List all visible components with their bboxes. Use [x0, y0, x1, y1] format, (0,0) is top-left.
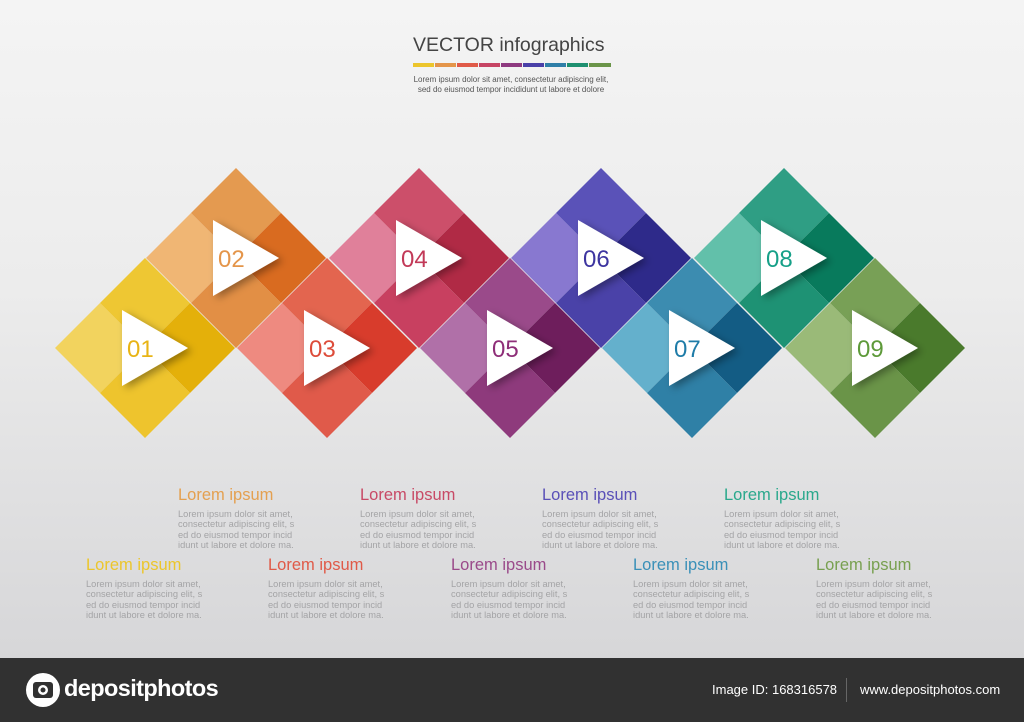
text block 04	[360, 486, 476, 550]
text: Lorem ipsum dolor sit amet,	[542, 509, 657, 519]
text: idunt ut labore et dolore ma.	[633, 610, 749, 620]
text block 09	[816, 556, 932, 620]
diamond 03: 03	[309, 336, 336, 363]
diamond 04: 04	[401, 246, 428, 273]
diamond 03	[237, 258, 417, 438]
text: Lorem ipsum	[360, 486, 455, 504]
text: consectetur adipiscing elit, s	[451, 589, 567, 599]
text: Lorem ipsum dolor sit amet,	[633, 579, 748, 589]
color bar	[413, 63, 611, 67]
text: Lorem ipsum	[633, 556, 728, 574]
diamond 06: 06	[583, 246, 610, 273]
text: Lorem ipsum dolor sit amet,	[178, 509, 293, 519]
text: idunt ut labore et dolore ma.	[86, 610, 202, 620]
diamond 02: 02	[218, 246, 245, 273]
diamond 09	[785, 258, 965, 438]
text block 01	[86, 556, 202, 620]
text block 05	[451, 556, 567, 620]
text: ed do eiusmod tempor incid	[724, 530, 838, 540]
text: Lorem ipsum dolor sit amet,	[268, 579, 383, 589]
text: consectetur adipiscing elit, s	[816, 589, 932, 599]
subtitle	[414, 75, 608, 94]
diamond 08	[694, 168, 874, 348]
diamond 07	[602, 258, 782, 438]
text: Lorem ipsum dolor sit amet,	[360, 509, 475, 519]
diamond 01: 01	[127, 336, 154, 363]
text: idunt ut labore et dolore ma.	[268, 610, 384, 620]
website: www.depositphotos.com	[860, 682, 1000, 697]
diamond 07: 07	[674, 336, 701, 363]
text: ed do eiusmod tempor incid	[633, 600, 747, 610]
subtitle: Lorem ipsum dolor sit amet, consectetur adipiscing elit,	[414, 75, 608, 84]
diamond 09: 09	[857, 336, 884, 363]
text: consectetur adipiscing elit, s	[724, 519, 840, 529]
text: idunt ut labore et dolore ma.	[360, 540, 476, 550]
diamond 04	[329, 168, 509, 348]
text: idunt ut labore et dolore ma.	[816, 610, 932, 620]
text: consectetur adipiscing elit, s	[178, 519, 294, 529]
text: idunt ut labore et dolore ma.	[451, 610, 567, 620]
text: Lorem ipsum	[542, 486, 637, 504]
diamond 02	[146, 168, 326, 348]
text block 07	[633, 556, 749, 620]
text: idunt ut labore et dolore ma.	[178, 540, 294, 550]
text: Lorem ipsum dolor sit amet,	[724, 509, 839, 519]
diamond 06	[511, 168, 691, 348]
text: idunt ut labore et dolore ma.	[724, 540, 840, 550]
text block 08	[724, 486, 840, 550]
text: consectetur adipiscing elit, s	[633, 589, 749, 599]
diamond 01	[55, 258, 235, 438]
text: Lorem ipsum	[178, 486, 273, 504]
text: ed do eiusmod tempor incid	[816, 600, 930, 610]
text: Lorem ipsum	[268, 556, 363, 574]
text: consectetur adipiscing elit, s	[86, 589, 202, 599]
text: ed do eiusmod tempor incid	[542, 530, 656, 540]
text: ed do eiusmod tempor incid	[178, 530, 292, 540]
text: consectetur adipiscing elit, s	[268, 589, 384, 599]
text: Lorem ipsum dolor sit amet,	[451, 579, 566, 589]
text block 06	[542, 486, 658, 550]
text: Lorem ipsum	[816, 556, 911, 574]
text: idunt ut labore et dolore ma.	[542, 540, 658, 550]
text: Lorem ipsum dolor sit amet,	[816, 579, 931, 589]
diamond chain	[55, 168, 965, 438]
text: Lorem ipsum	[724, 486, 819, 504]
image id: Image ID: 168316578	[712, 682, 837, 697]
text: ed do eiusmod tempor incid	[451, 600, 565, 610]
title: VECTOR infographics	[413, 34, 604, 56]
text: consectetur adipiscing elit, s	[542, 519, 658, 529]
text: ed do eiusmod tempor incid	[86, 600, 200, 610]
text: Lorem ipsum	[86, 556, 181, 574]
logo text: depositphotos	[64, 675, 218, 701]
diamond 08: 08	[766, 246, 793, 273]
text: Lorem ipsum	[451, 556, 546, 574]
text: consectetur adipiscing elit, s	[360, 519, 476, 529]
text: Lorem ipsum dolor sit amet,	[86, 579, 201, 589]
text block 03	[268, 556, 384, 620]
text block 02	[178, 486, 294, 550]
diamond 05	[420, 258, 600, 438]
footer bar	[0, 658, 1024, 722]
subtitle: sed do eiusmod tempor incididunt ut labore et dolore	[418, 85, 604, 94]
diamond 05: 05	[492, 336, 519, 363]
text: ed do eiusmod tempor incid	[360, 530, 474, 540]
icon: camera logo	[26, 673, 60, 707]
text: ed do eiusmod tempor incid	[268, 600, 382, 610]
